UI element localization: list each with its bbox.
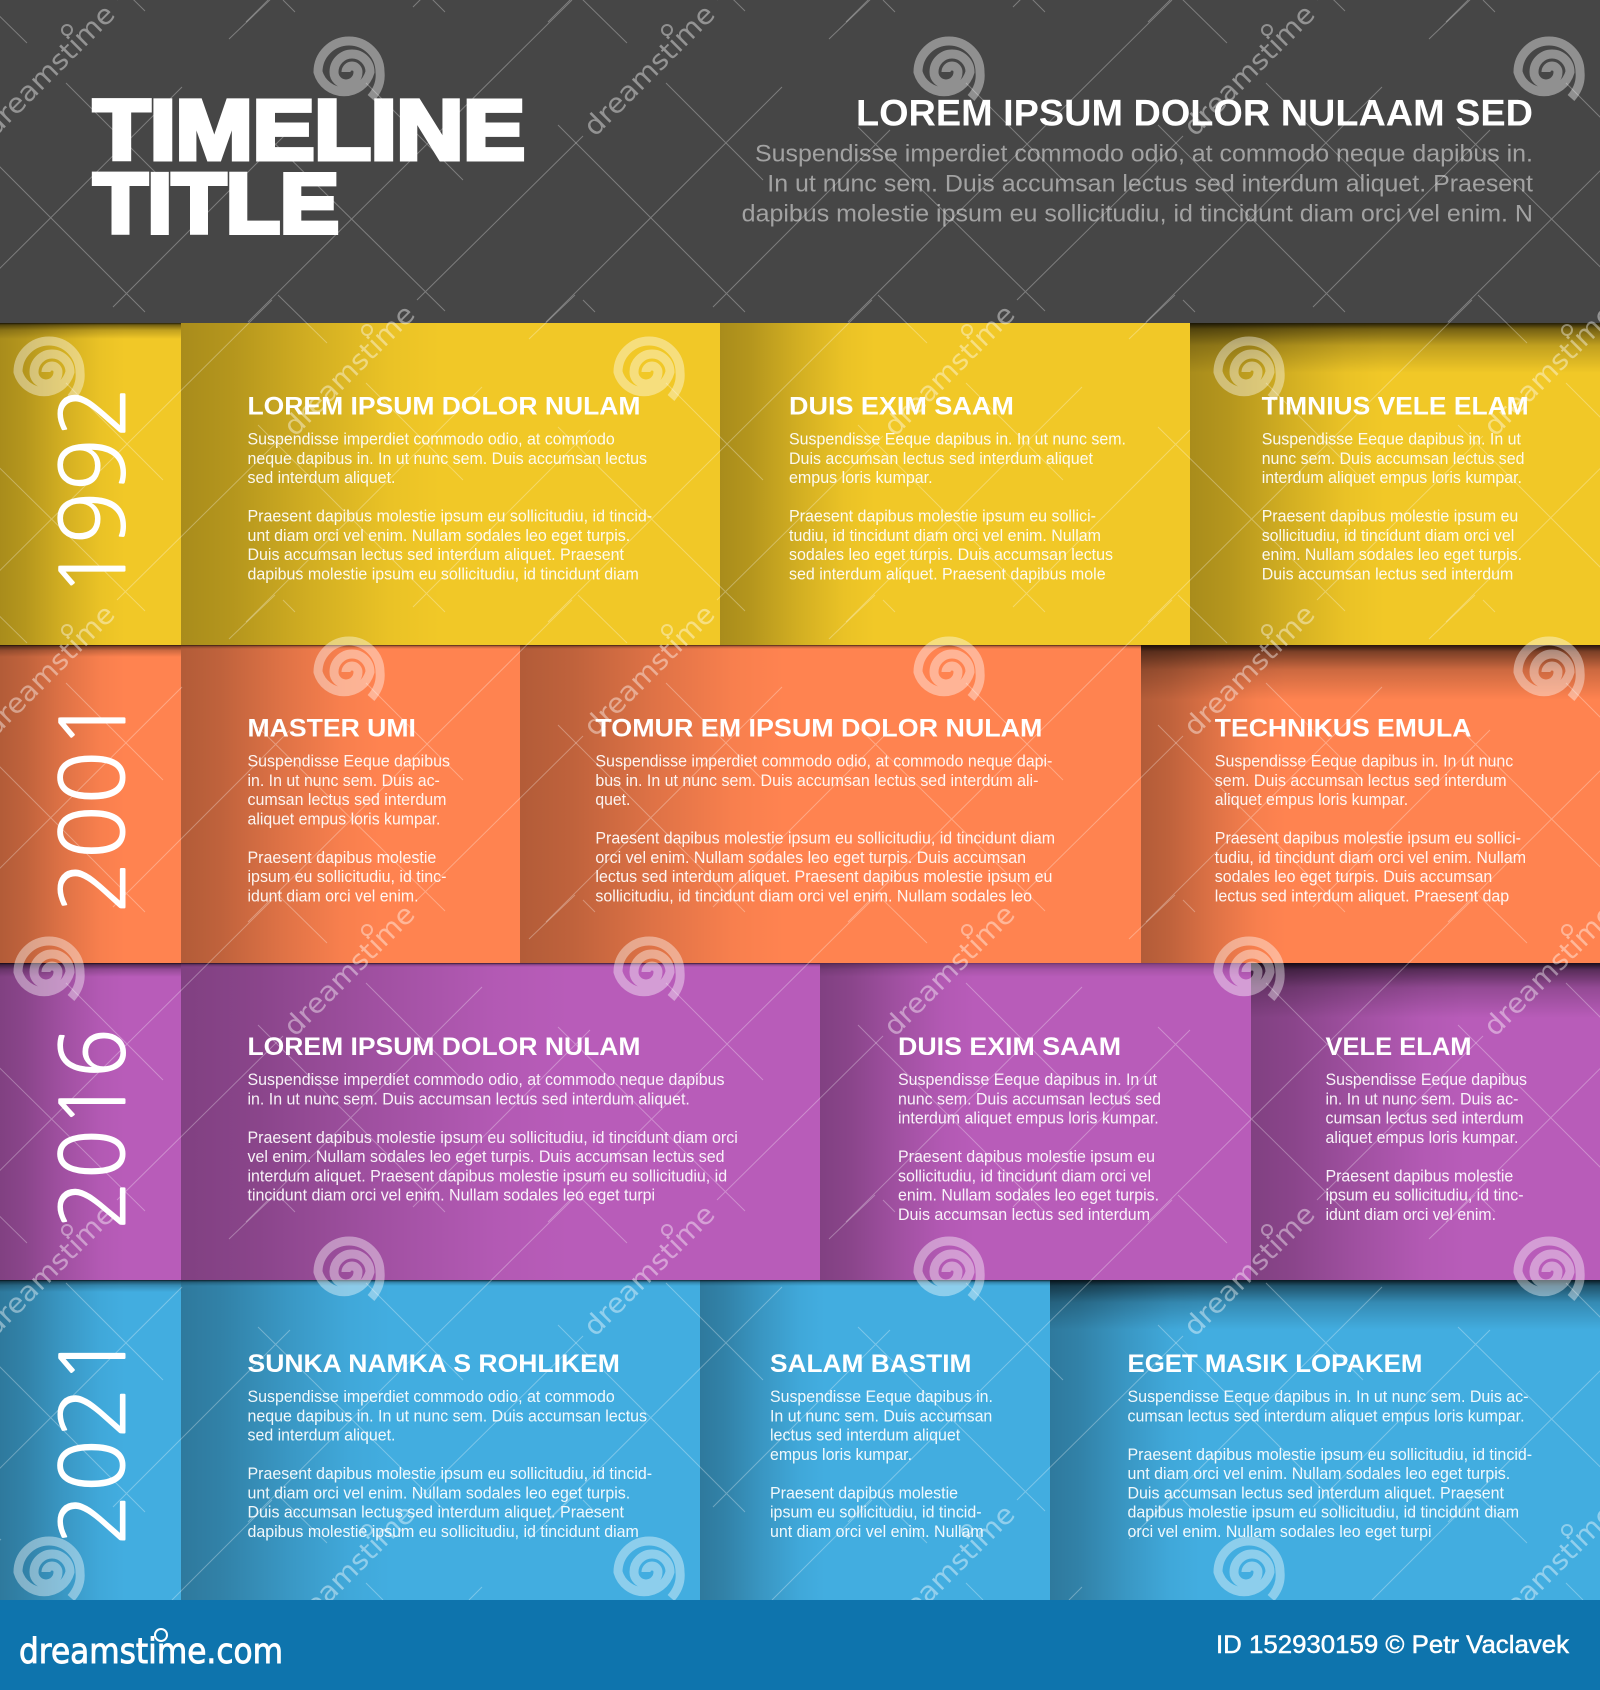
card: Lorem ipsum dolor nulam: Praesent dapibus molestie ipsum eu sollicitudiu, id tincid-: [248, 508, 652, 526]
card: Sunka namka s rohlikem: Suspendisse imperdiet commodo odio, at commodo: [248, 1388, 615, 1406]
panel: 2016 row: [0, 963, 1600, 1280]
lowest watermark row: dreamstime: [278, 1499, 421, 1642]
card: Technikus emula: lectus sed interdum aliquet. Praesent dap: [1215, 887, 1509, 905]
year 2021: 2021: [48, 1332, 138, 1546]
panel: 2021 row: [0, 1280, 1600, 1600]
card: Master Umi: MASTER UMI: [248, 714, 416, 742]
watermark overlay: dreamstime: [878, 299, 1021, 442]
card: Salam bastim: lectus sed interdum aliquet: [770, 1426, 961, 1444]
header text block: Suspendisse imperdiet commodo odio, at commodo neque dapibus in.: [755, 141, 1533, 168]
panel: 1992 row: [0, 323, 1600, 645]
card: Duis exim saam: [820, 963, 1251, 1280]
card: Duis exim saam: Praesent dapibus molestie ipsum eu sollici-: [789, 508, 1096, 526]
header text block: [742, 141, 1533, 228]
card: Vele elam: aliquet empus loris kumpar.: [1326, 1129, 1518, 1147]
card: Duis exim saam: [720, 323, 1126, 645]
card: Eget masik lopakem: orci vel enim. Nullam sodales leo eget turpi: [1128, 1523, 1432, 1541]
watermark overlay: dreamstime: [278, 899, 421, 1042]
year 2021: [0, 1280, 181, 1600]
card: Tomur em ipsum dolor nulam: quet.: [595, 791, 630, 809]
card: Master Umi: Suspendisse Eeque dapibus: [248, 753, 450, 771]
card: Lorem ipsum dolor nulam: neque dapibus in. In ut nunc sem. Duis accumsan lectus: [248, 450, 647, 468]
card: Timnius vele elam: interdum aliquet empus loris kumpar.: [1262, 469, 1522, 487]
card: Duis exim saam: enim. Nullam sodales leo eget turpis.: [898, 1186, 1159, 1204]
card: Technikus emula: [1141, 645, 1600, 963]
card: Lorem ipsum dolor nulam: Suspendisse imperdiet commodo odio, at commodo neque dapibus: [248, 1071, 724, 1089]
card: Salam bastim: ipsum eu sollicitudiu, id tincid-: [770, 1504, 982, 1522]
card: Master Umi: Praesent dapibus molestie: [248, 849, 436, 867]
card: Duis exim saam: DUIS EXIM SAAM: [898, 1033, 1121, 1061]
card: Master Umi: [181, 645, 520, 963]
card: Vele elam: Praesent dapibus molestie: [1326, 1167, 1513, 1185]
card: Vele elam: VELE ELAM: [1326, 1033, 1472, 1061]
year 2016: [0, 963, 181, 1280]
panel: footer: [0, 1600, 1600, 1690]
card: Tomur em ipsum dolor nulam: lectus sed interdum aliquet. Praesent dapibus molestie ipsum eu: [595, 868, 1052, 886]
card: Technikus emula: TECHNIKUS EMULA: [1215, 714, 1471, 742]
header text block: In ut nunc sem. Duis accumsan lectus sed interdum aliquet. Praesent: [767, 171, 1533, 198]
card: Timnius vele elam: Suspendisse Eeque dapibus in. In ut: [1262, 431, 1521, 449]
card: Vele elam: in. In ut nunc sem. Duis ac-: [1326, 1090, 1518, 1108]
card: Lorem ipsum dolor nulam: Praesent dapibus molestie ipsum eu sollicitudiu, id tincidunt diam orci: [248, 1129, 738, 1147]
card: Master Umi: in. In ut nunc sem. Duis ac-: [248, 772, 440, 790]
card: Timnius vele elam: TIMNIUS VELE ELAM: [1262, 392, 1529, 420]
watermark overlay: dreamstime: [578, 1199, 721, 1342]
title: TITLE: [94, 156, 339, 250]
panel: header: [0, 0, 1600, 323]
card: Vele elam: ipsum eu sollicitudiu, id tinc-: [1326, 1186, 1524, 1204]
card: Tomur em ipsum dolor nulam: [520, 645, 1141, 963]
card: Tomur em ipsum dolor nulam: Suspendisse imperdiet commodo odio, at commodo neque dapi-: [595, 753, 1052, 771]
card: Salam bastim: empus loris kumpar.: [770, 1446, 912, 1464]
card: Master Umi: ipsum eu sollicitudiu, id tinc-: [248, 868, 446, 886]
card: Lorem ipsum dolor nulam: Suspendisse imperdiet commodo odio, at commodo: [248, 431, 615, 449]
card: Tomur em ipsum dolor nulam: TOMUR EM IPSUM DOLOR NULAM: [595, 714, 1042, 742]
card: Technikus emula: Suspendisse Eeque dapibus in. In ut nunc: [1215, 753, 1513, 771]
card: Sunka namka s rohlikem: Praesent dapibus molestie ipsum eu sollicitudiu, id tincid-: [248, 1465, 652, 1483]
card: Tomur em ipsum dolor nulam: sollicitudiu, id tincidunt diam orci vel enim. Nullam sodales leo: [595, 887, 1032, 905]
lowest watermark row: dreamstime: [878, 1499, 1021, 1642]
card: Duis exim saam: interdum aliquet empus loris kumpar.: [898, 1110, 1159, 1128]
card: Tomur em ipsum dolor nulam: Praesent dapibus molestie ipsum eu sollicitudiu, id tincidunt diam: [595, 830, 1055, 848]
card: Vele elam: [1251, 963, 1600, 1280]
watermark overlay: dreamstime: [278, 299, 421, 442]
card: Tomur em ipsum dolor nulam: bus in. In ut nunc sem. Duis accumsan lectus sed interdum ali-: [595, 772, 1038, 790]
card: Eget masik lopakem: Praesent dapibus molestie ipsum eu sollicitudiu, id tincid-: [1128, 1446, 1532, 1464]
card: Sunka namka s rohlikem: dapibus molestie ipsum eu sollicitudiu, id tincidunt diam: [248, 1523, 639, 1541]
card: Timnius vele elam: nunc sem. Duis accumsan lectus sed: [1262, 450, 1524, 468]
card: Eget masik lopakem: [1050, 1280, 1600, 1600]
card: Lorem ipsum dolor nulam: LOREM IPSUM DOLOR NULAM: [248, 1033, 640, 1061]
card: Lorem ipsum dolor nulam: in. In ut nunc sem. Duis accumsan lectus sed interdum aliquet.: [248, 1090, 690, 1108]
card: Salam bastim: SALAM BASTIM: [770, 1350, 971, 1378]
card: Duis exim saam: tudiu, id tincidunt diam orci vel enim. Nullam: [789, 527, 1101, 545]
card: Master Umi: aliquet empus loris kumpar.: [248, 810, 440, 828]
card: Sunka namka s rohlikem: [181, 1280, 700, 1600]
title: [94, 83, 525, 250]
card: Sunka namka s rohlikem: neque dapibus in. In ut nunc sem. Duis accumsan lectus: [248, 1407, 647, 1425]
footer credit: ID 152930159 © Petr Vaclavek: [1216, 1631, 1570, 1659]
title: TIMELINE: [94, 83, 525, 177]
watermark overlay: dreamstime: [578, 599, 721, 742]
year 1992: [0, 323, 181, 645]
card: Duis exim saam: sodales leo eget turpis. Duis accumsan lectus: [789, 546, 1113, 564]
card: Timnius vele elam: sollicitudiu, id tincidunt diam orci vel: [1262, 527, 1514, 545]
year 2001: 2001: [48, 696, 138, 914]
card: Duis exim saam: empus loris kumpar.: [789, 469, 933, 487]
card: Lorem ipsum dolor nulam: unt diam orci vel enim. Nullam sodales leo eget turpis.: [248, 527, 630, 545]
watermark overlay: dreamstime: [578, 0, 721, 142]
card: Eget masik lopakem: EGET MASIK LOPAKEM: [1128, 1350, 1422, 1378]
watermark overlay: dreamstime: [1178, 599, 1321, 742]
watermark overlay: dreamstime: [878, 899, 1021, 1042]
card: Technikus emula: aliquet empus loris kumpar.: [1215, 791, 1408, 809]
card: Tomur em ipsum dolor nulam: orci vel enim. Nullam sodales leo eget turpis. Duis accumsan: [595, 849, 1026, 867]
card: Eget masik lopakem: cumsan lectus sed interdum aliquet empus loris kumpar.: [1128, 1407, 1524, 1425]
card: Eget masik lopakem: Duis accumsan lectus sed interdum aliquet. Praesent: [1128, 1484, 1504, 1502]
card: Eget masik lopakem: dapibus molestie ipsum eu sollicitudiu, id tincidunt diam: [1128, 1504, 1519, 1522]
card: Lorem ipsum dolor nulam: sed interdum aliquet.: [248, 469, 396, 487]
card: Lorem ipsum dolor nulam: [181, 963, 820, 1280]
card: Lorem ipsum dolor nulam: [181, 323, 652, 645]
card: Salam bastim: In ut nunc sem. Duis accumsan: [770, 1407, 992, 1425]
card: Lorem ipsum dolor nulam: Duis accumsan lectus sed interdum aliquet. Praesent: [248, 546, 624, 564]
card: Lorem ipsum dolor nulam: tincidunt diam orci vel enim. Nullam sodales leo eget turpi: [248, 1186, 655, 1204]
panel: 2001 row: [0, 645, 1600, 963]
header subtitle: LOREM IPSUM DOLOR NULAAM SED: [856, 92, 1533, 133]
card: Duis exim saam: Suspendisse Eeque dapibus in. In ut: [898, 1071, 1157, 1089]
card: Lorem ipsum dolor nulam: LOREM IPSUM DOLOR NULAM: [248, 392, 640, 420]
card: Vele elam: idunt diam orci vel enim.: [1326, 1206, 1496, 1224]
card: Lorem ipsum dolor nulam: dapibus molestie ipsum eu sollicitudiu, id tincidunt diam: [248, 566, 639, 584]
card: Salam bastim: [700, 1280, 1050, 1600]
card: Duis exim saam: sed interdum aliquet. Praesent dapibus mole: [789, 566, 1106, 584]
card: Timnius vele elam: enim. Nullam sodales leo eget turpis.: [1262, 546, 1522, 564]
card: Salam bastim: Suspendisse Eeque dapibus in.: [770, 1388, 993, 1406]
card: Sunka namka s rohlikem: SUNKA NAMKA S ROHLIKEM: [248, 1350, 620, 1378]
card: Duis exim saam: DUIS EXIM SAAM: [789, 392, 1014, 420]
card: Salam bastim: unt diam orci vel enim. Nullam: [770, 1523, 984, 1541]
card: Duis exim saam: Praesent dapibus molestie ipsum eu: [898, 1148, 1155, 1166]
card: Technikus emula: tudiu, id tincidunt diam orci vel enim. Nullam: [1215, 849, 1526, 867]
card: Technikus emula: sem. Duis accumsan lectus sed interdum: [1215, 772, 1507, 790]
lowest watermark row: [0, 1495, 1600, 1642]
card: Eget masik lopakem: unt diam orci vel enim. Nullam sodales leo eget turpis.: [1128, 1465, 1510, 1483]
card: Duis exim saam: Suspendisse Eeque dapibus in. In ut nunc sem.: [789, 431, 1126, 449]
card: Duis exim saam: nunc sem. Duis accumsan lectus sed: [898, 1090, 1161, 1108]
card: Technikus emula: Praesent dapibus molestie ipsum eu sollici-: [1215, 830, 1521, 848]
card: Vele elam: cumsan lectus sed interdum: [1326, 1110, 1524, 1128]
card: Master Umi: idunt diam orci vel enim.: [248, 887, 418, 905]
card: Master Umi: cumsan lectus sed interdum: [248, 791, 446, 809]
card: Sunka namka s rohlikem: Duis accumsan lectus sed interdum aliquet. Praesent: [248, 1504, 624, 1522]
card: Technikus emula: sodales leo eget turpis. Duis accumsan: [1215, 868, 1492, 886]
card: Duis exim saam: Duis accumsan lectus sed interdum aliquet: [789, 450, 1093, 468]
year 1992: 1992: [48, 385, 138, 598]
card: Lorem ipsum dolor nulam: interdum aliquet. Praesent dapibus molestie ipsum eu sollicitudiu, id: [248, 1167, 727, 1185]
watermark overlay: dreamstime: [1178, 0, 1321, 142]
card: Timnius vele elam: Duis accumsan lectus sed interdum: [1262, 566, 1513, 584]
footer logo: dreamstime.com: [19, 1632, 283, 1672]
card: Lorem ipsum dolor nulam: vel enim. Nullam sodales leo eget turpis. Duis accumsan lectus sed: [248, 1148, 724, 1166]
year 2001: [0, 645, 181, 963]
card: Vele elam: Suspendisse Eeque dapibus: [1326, 1071, 1527, 1089]
card: Sunka namka s rohlikem: sed interdum aliquet.: [248, 1426, 396, 1444]
header text block: dapibus molestie ipsum eu sollicitudiu, id tincidunt diam orci vel enim. N: [742, 201, 1533, 228]
watermark overlay: dreamstime: [1178, 1199, 1321, 1342]
card: Timnius vele elam: Praesent dapibus molestie ipsum eu: [1262, 508, 1518, 526]
card: Duis exim saam: sollicitudiu, id tincidunt diam orci vel: [898, 1167, 1151, 1185]
year 2016: 2016: [48, 1028, 138, 1230]
card: Timnius vele elam: [1190, 323, 1600, 645]
card: Salam bastim: Praesent dapibus molestie: [770, 1484, 958, 1502]
card: Eget masik lopakem: Suspendisse Eeque dapibus in. In ut nunc sem. Duis ac-: [1128, 1388, 1528, 1406]
card: Sunka namka s rohlikem: unt diam orci vel enim. Nullam sodales leo eget turpis.: [248, 1484, 630, 1502]
card: Duis exim saam: Duis accumsan lectus sed interdum: [898, 1206, 1150, 1224]
